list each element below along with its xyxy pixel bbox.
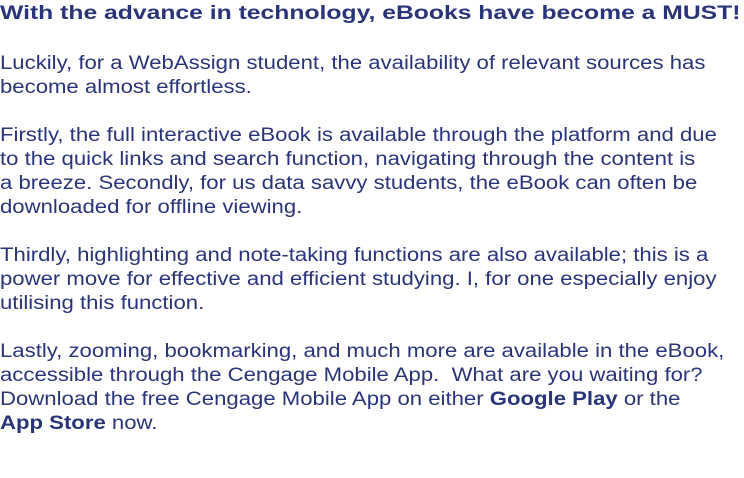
body text: Luckily, for a WebAssign student, the availability of relevant sources has become almost effortless. Firstly, the full interactive eBook is available through the platform and due to the quick links and search function, navigating through the content is a breeze. Secondly, for us data savvy students, the eBook can often be downloaded for offline viewing. Thirdly, highlighting and note-taking functions are also available; this is a power move for effective and efficient studying. I, for one especially enjoy utilising this function. Lastly, zooming, bookmarking, and much more are available in the eBook, accessible through the Cengage Mobile App. What are you waiting for? Download the free Cengage Mobile App on either Google Play or the App Store now. — [0, 53, 724, 434]
title: With the advance in technology, eBooks have become a MUST! — [0, 3, 740, 24]
